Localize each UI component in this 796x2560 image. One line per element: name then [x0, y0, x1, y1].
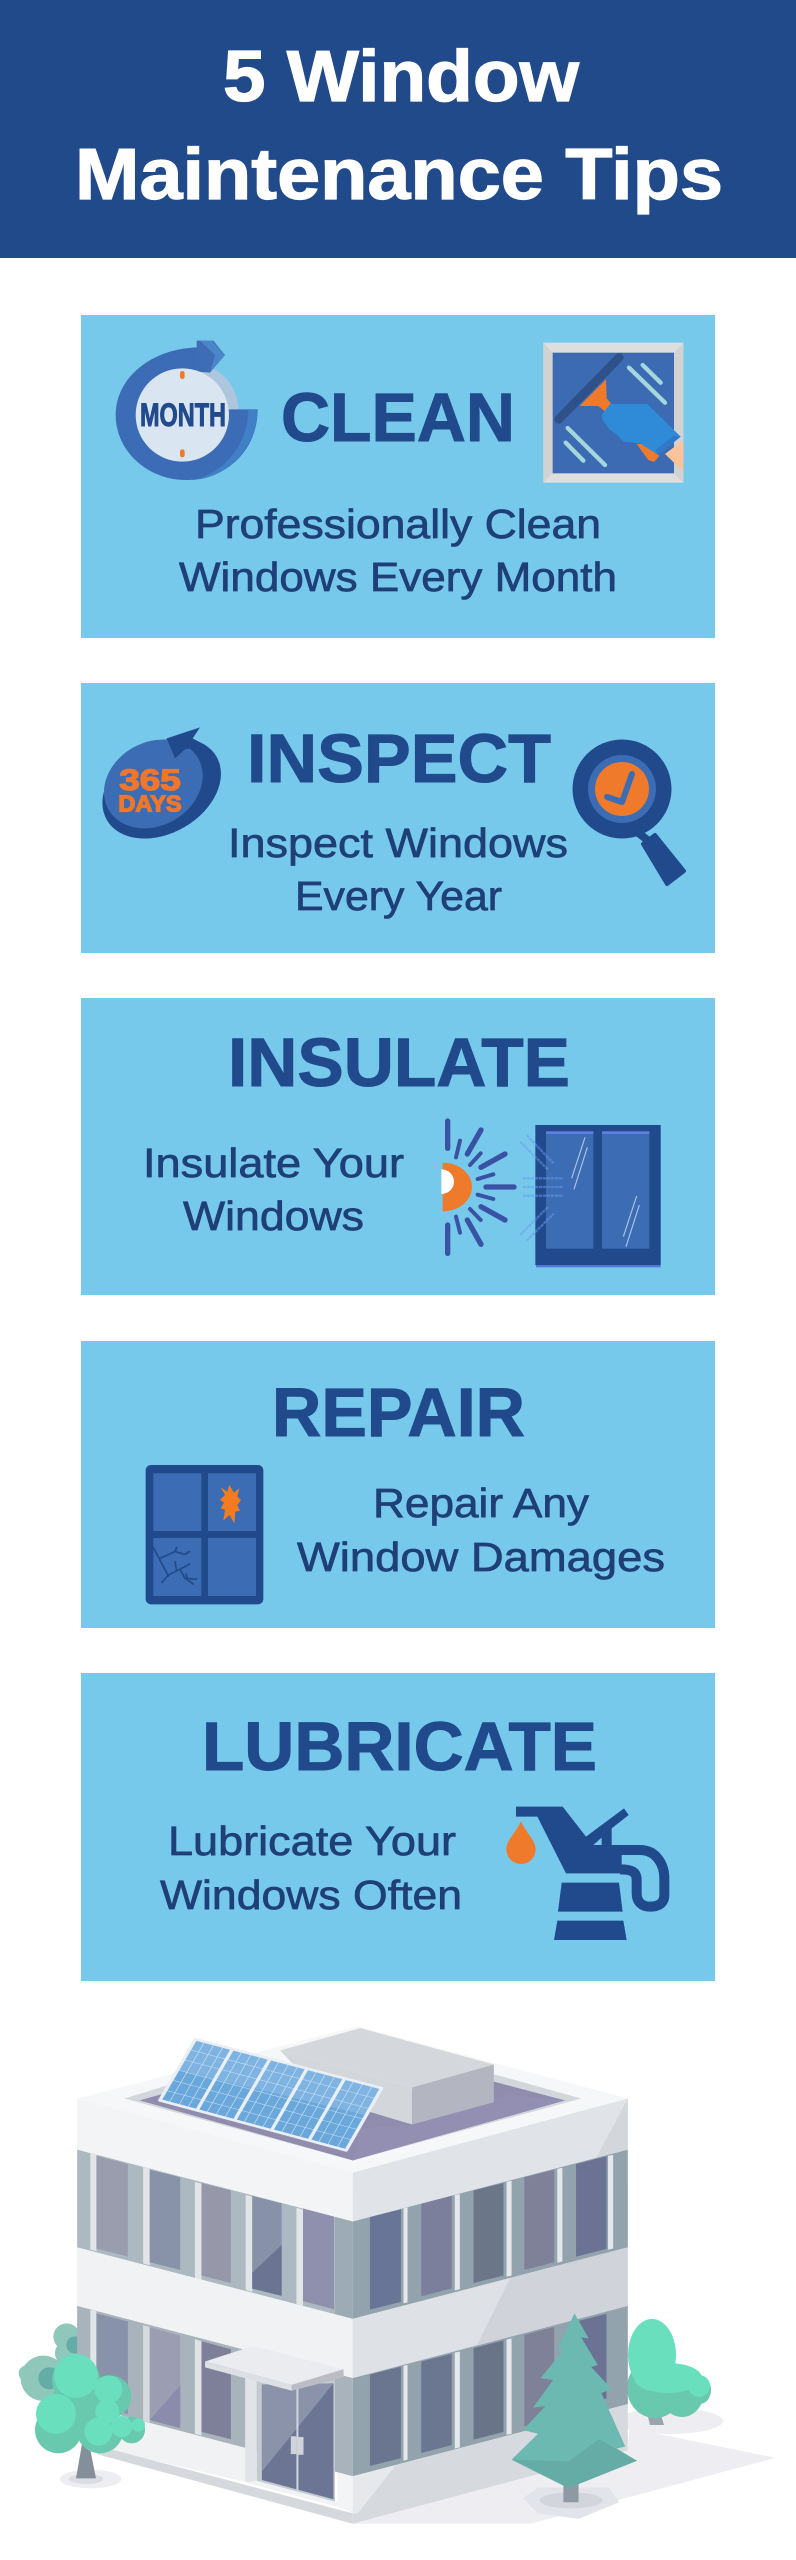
- description: repair: [297, 1480, 665, 1580]
- icon: month calendar cycle: MONTH: [140, 397, 226, 433]
- description: lubricate: Lubricate Your: [168, 1818, 456, 1864]
- ground floor walls: [77, 2404, 245, 2482]
- description: clean: [179, 501, 617, 600]
- solar panels: [160, 2039, 382, 2150]
- panel: clean: [81, 315, 715, 638]
- description: lubricate: [160, 1818, 462, 1918]
- tree: pine: [512, 2313, 637, 2519]
- upper floor: [77, 2150, 353, 2319]
- icon: damaged window: [146, 1465, 263, 1604]
- icon: oil can with drop: [506, 1807, 664, 1940]
- top band: [77, 2099, 353, 2221]
- panel: insulate: [81, 998, 715, 1295]
- lower floor: [77, 2306, 353, 2476]
- panel: repair: [81, 1341, 715, 1628]
- panel: inspect: [81, 683, 715, 953]
- heading: inspect: INSPECT: [247, 720, 551, 797]
- icon: 365 days cycle: DAYS: [118, 791, 182, 817]
- description: insulate: [143, 1140, 404, 1239]
- tree: back right: [617, 2319, 723, 2434]
- illustration: office building with solar panels and trees: [19, 2026, 776, 2524]
- description: repair: Window Damages: [297, 1534, 665, 1580]
- description: insulate: Windows: [183, 1193, 364, 1239]
- tree: front left: [35, 2354, 145, 2488]
- icon: sun heat and insulated window: [441, 1121, 661, 1267]
- description: clean: Professionally Clean: [195, 501, 601, 547]
- description: clean: Windows Every Month: [179, 554, 617, 600]
- description: inspect: [228, 820, 568, 919]
- heading: clean: CLEAN: [281, 379, 515, 456]
- title banner: 5 Window: [223, 37, 580, 117]
- heading: lubricate: LUBRICATE: [202, 1708, 597, 1785]
- entrance: [205, 2346, 344, 2507]
- roof: [77, 2026, 628, 2173]
- title banner: Maintenance Tips: [75, 135, 723, 215]
- icon: 365 days cycle: 365: [119, 764, 181, 797]
- building body: [77, 2026, 776, 2524]
- icon: magnifying glass with check: [572, 740, 684, 884]
- icon: month calendar cycle: [116, 341, 258, 480]
- heading: insulate: INSULATE: [228, 1024, 570, 1101]
- tree: back left: [19, 2323, 84, 2401]
- description: insulate: Insulate Your: [143, 1140, 404, 1186]
- middle band: [77, 2247, 353, 2378]
- description: lubricate: Windows Often: [160, 1872, 462, 1918]
- icon: squeegee on window: [543, 343, 683, 483]
- panel: lubricate: [81, 1673, 715, 1981]
- description: inspect: Every Year: [295, 873, 502, 919]
- title banner: [0, 0, 796, 258]
- icon: 365 days cycle: [84, 718, 239, 859]
- description: repair: Repair Any: [373, 1480, 590, 1526]
- heading: repair: REPAIR: [272, 1374, 525, 1451]
- description: inspect: Inspect Windows: [228, 820, 568, 866]
